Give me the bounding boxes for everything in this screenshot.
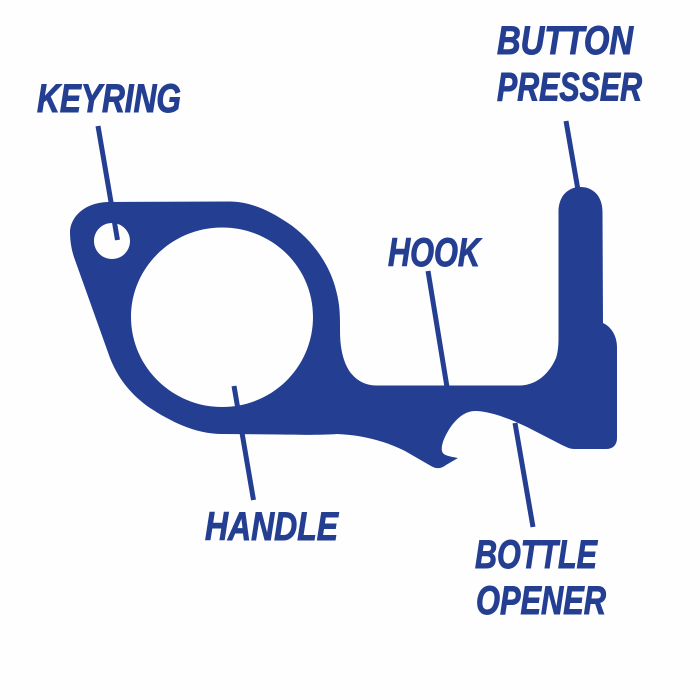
leader line: button presser	[566, 121, 578, 190]
label: bottle opener	[475, 533, 606, 623]
leader line: handle	[234, 386, 254, 500]
label: handle: HANDLE	[205, 505, 339, 549]
tool body	[70, 187, 617, 468]
label: bottle opener: BOTTLE	[475, 533, 598, 577]
label: button presser: BUTTON	[497, 19, 634, 63]
leader line: bottle opener	[515, 423, 533, 527]
label: keyring: KEYRING	[37, 77, 181, 121]
leader line: hook	[428, 271, 447, 387]
label: button presser: PRESSER	[497, 66, 642, 110]
label: bottle opener: OPENER	[476, 579, 606, 623]
label: button presser	[497, 19, 642, 110]
leader line: keyring	[98, 126, 118, 240]
label: hook: HOOK	[388, 231, 482, 275]
